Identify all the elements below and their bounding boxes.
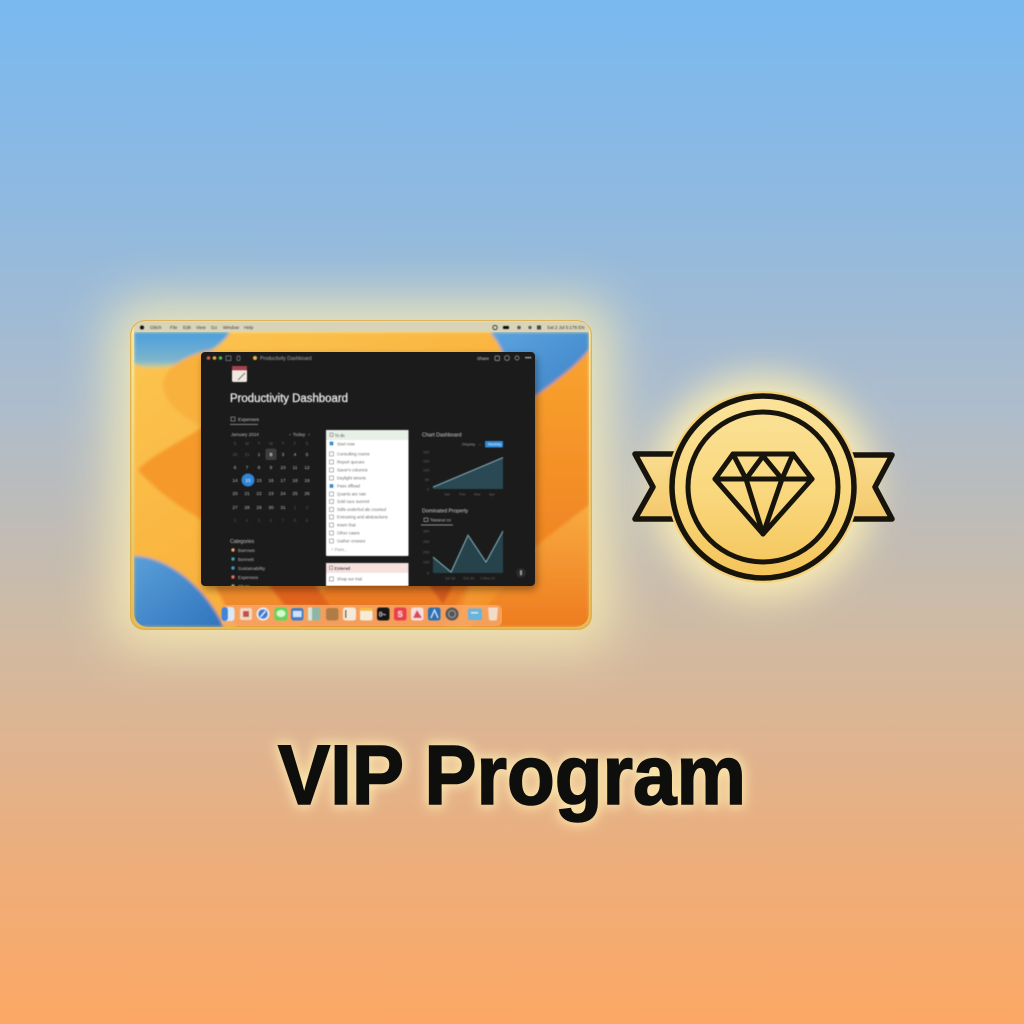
dock xyxy=(221,605,502,626)
app window: productivity dashboard xyxy=(201,352,537,590)
calendar: T xyxy=(258,441,261,446)
calendar: 7 xyxy=(246,465,249,471)
calendar: 22 xyxy=(256,491,262,497)
to-do list panel: Report queues xyxy=(337,460,364,464)
calendar: 2 xyxy=(306,505,309,511)
categories list: Barrows xyxy=(238,548,256,553)
calendar: 14 xyxy=(232,478,238,484)
calendar: 1 xyxy=(294,505,297,511)
menu bar: Go xyxy=(211,325,218,330)
calendar: 5 xyxy=(258,518,261,524)
icon: messages xyxy=(274,608,288,620)
calendar: 6 xyxy=(234,465,237,471)
icon: settings xyxy=(446,608,458,620)
calendar: 28 xyxy=(244,505,250,511)
to-do list panel: Start now xyxy=(337,442,356,446)
to-do list panel: Pass offload xyxy=(337,484,361,488)
categories list: Sustainability xyxy=(238,566,266,571)
menu bar: Glitch xyxy=(150,325,162,330)
calendar: F xyxy=(294,441,297,446)
area chart: Dominated Property: 200 xyxy=(423,550,429,554)
area chart: Dominated Property: Oct 20 xyxy=(463,576,474,580)
calendar: 6 xyxy=(270,518,273,524)
calendar: M xyxy=(245,441,249,446)
icon: red app xyxy=(394,608,406,620)
calendar: › xyxy=(308,432,310,437)
calendar: 9 xyxy=(270,465,273,471)
area chart: Chart Dashboard: 200 xyxy=(423,450,429,454)
to-do list panel: Stills underfed als counted xyxy=(337,507,387,512)
calendar: 12 xyxy=(304,465,310,471)
tab: Expenses xyxy=(230,417,260,425)
calendar: 29 xyxy=(256,505,262,511)
icon: pink app xyxy=(411,608,424,620)
icon: diamond xyxy=(715,454,812,534)
area chart: Dominated Property: 300 xyxy=(423,530,429,534)
menu bar: Window xyxy=(223,325,240,330)
calendar: 11 xyxy=(293,465,298,471)
icon: mail xyxy=(291,608,304,620)
entered panel: Entered xyxy=(334,566,351,571)
icon: brown app xyxy=(326,608,338,620)
to-do list panel: Consulting rooms xyxy=(337,452,370,456)
calendar: ‹ xyxy=(289,432,291,437)
calendar: 27 xyxy=(232,505,238,511)
icon: folder xyxy=(360,608,372,620)
calendar: 7 xyxy=(282,518,285,524)
entered panel: Shop our trial xyxy=(337,576,362,582)
area chart: Dominated Property: 100 xyxy=(423,560,429,564)
to-do list panel: Gather crosses xyxy=(337,538,365,544)
calendar: 1 xyxy=(258,452,261,458)
categories list: Bennett xyxy=(238,557,255,562)
calendar: 9 xyxy=(306,518,309,524)
calendar: 3 xyxy=(282,452,285,458)
desktop wallpaper xyxy=(134,332,589,627)
calendar: January 2024 xyxy=(231,432,259,437)
window title bar: Share xyxy=(477,356,490,361)
menu bar: Edit xyxy=(183,325,192,330)
area chart: Chart Dashboard: Display xyxy=(462,442,475,446)
window title bar: Productivity Dashboard xyxy=(260,356,312,362)
calendar: 17 xyxy=(280,478,286,484)
icon: terminal: 0~ xyxy=(379,612,386,618)
calendar: Today xyxy=(293,432,306,437)
area chart: Chart Dashboard: Mar xyxy=(474,492,481,496)
area chart: Chart Dashboard: Feb xyxy=(459,492,466,496)
calendar: S xyxy=(306,441,309,446)
to-do list panel: Entrusting and abstractions xyxy=(337,514,388,520)
area chart: Chart Dashboard xyxy=(422,432,503,496)
calendar: 18 xyxy=(292,478,298,484)
to-do list panel: Daylight streets xyxy=(337,476,366,480)
calendar: 25 xyxy=(292,491,298,497)
calendar: 31 xyxy=(244,452,250,458)
calendar: S xyxy=(234,441,237,446)
to-do list panel xyxy=(326,430,408,556)
calendar: 15 xyxy=(245,478,251,484)
calendar: 24 xyxy=(280,491,286,497)
icon: calendar app xyxy=(240,608,252,620)
area chart: Chart Dashboard: 50 xyxy=(425,478,429,482)
title: VIP Program: VIP Program xyxy=(278,728,746,822)
window title bar: ••• xyxy=(525,356,531,362)
area chart: Chart Dashboard: 0 xyxy=(427,488,429,492)
calendar: T xyxy=(282,441,285,446)
calendar: 19 xyxy=(304,478,310,484)
menu bar: File xyxy=(170,325,178,330)
icon: maps xyxy=(308,608,320,620)
area chart: Dominated Property xyxy=(421,508,503,580)
calendar: 10 xyxy=(280,465,286,471)
categories list: Shuts xyxy=(238,584,250,589)
calendar: 5 xyxy=(306,452,309,458)
area chart: Chart Dashboard: Monthly xyxy=(488,442,501,446)
menu bar xyxy=(134,322,589,332)
calendar: 3 xyxy=(234,518,237,524)
laptop screenshot panel xyxy=(112,302,610,648)
icon: notes xyxy=(343,608,356,620)
area chart: Chart Dashboard: – xyxy=(479,442,482,446)
area chart: Dominated Property: 0 xyxy=(427,572,429,576)
area chart: Dominated Property: 250 xyxy=(423,540,429,544)
calendar: 4 xyxy=(246,518,249,524)
area chart: Chart Dashboard: Jan xyxy=(444,492,450,496)
to-do list panel: Sold race summit xyxy=(337,499,370,504)
calendar: 4 xyxy=(294,452,297,458)
calendar: 8 xyxy=(258,465,261,471)
to-do list panel: Insert that xyxy=(337,522,356,528)
medal coin xyxy=(667,391,859,583)
categories list: Categories xyxy=(230,539,255,545)
to-do list panel: Quants are rate xyxy=(337,492,367,496)
area chart: Dominated Property: Tasseur.co xyxy=(430,518,452,522)
calendar: 31 xyxy=(280,505,286,511)
icon: downloads folder xyxy=(468,608,482,620)
calendar: 30 xyxy=(232,452,238,458)
categories list: Expenses xyxy=(238,575,259,580)
calendar: 21 xyxy=(244,491,250,497)
title: VIP Program: VIP Program xyxy=(278,728,746,822)
icon: app store xyxy=(428,608,440,620)
window title bar xyxy=(207,356,531,362)
to-do list panel: + Pass... xyxy=(331,547,347,552)
area chart: Chart Dashboard: 100 xyxy=(423,468,429,472)
entered panel xyxy=(326,563,408,586)
calendar: 23 xyxy=(268,491,274,497)
VIP badge xyxy=(635,375,892,599)
ribbon: left xyxy=(635,454,677,519)
icon: safari xyxy=(256,608,270,620)
icon: trash xyxy=(488,608,498,621)
calendar: 26 xyxy=(304,491,310,497)
menu bar: Sat 2 Jul 5:178 EN xyxy=(547,325,585,330)
calendar: 16 xyxy=(268,478,274,484)
selected date xyxy=(242,474,254,486)
area chart: Chart Dashboard: 150 xyxy=(423,460,429,464)
menu bar: View xyxy=(196,325,206,330)
area chart: Dominated Property: Dominated Property xyxy=(422,508,469,514)
calendar: W xyxy=(269,441,273,446)
calendar: 20 xyxy=(232,491,238,497)
menu bar: Help xyxy=(244,325,254,330)
heading: Productivity Dashboard: Productivity Dashboard xyxy=(230,393,348,405)
calendar: 8 xyxy=(270,452,273,458)
help button xyxy=(516,568,526,578)
icon: terminal xyxy=(377,608,390,620)
icon: red app: S xyxy=(398,610,404,619)
area chart: Dominated Property: Jul 18 xyxy=(445,576,455,580)
calendar xyxy=(231,432,310,524)
categories list xyxy=(230,539,266,589)
area chart: Chart Dashboard: Chart Dashboard xyxy=(422,432,462,438)
calendar: 8 xyxy=(294,518,297,524)
calendar: 30 xyxy=(268,505,274,511)
ribbon: right xyxy=(849,455,892,519)
to-do list panel: Other cases xyxy=(337,530,360,536)
area chart: Dominated Property: 1 Nov 21 xyxy=(480,576,495,580)
area chart: Chart Dashboard: Apr xyxy=(489,492,496,496)
icon: calendar xyxy=(232,366,247,382)
to-do list panel: To do xyxy=(334,433,345,438)
tab: Expenses: Expenses xyxy=(238,417,260,423)
to-do list panel: Saver's columns xyxy=(337,468,368,472)
icon: finder xyxy=(222,607,234,621)
calendar: 15 xyxy=(256,478,262,484)
